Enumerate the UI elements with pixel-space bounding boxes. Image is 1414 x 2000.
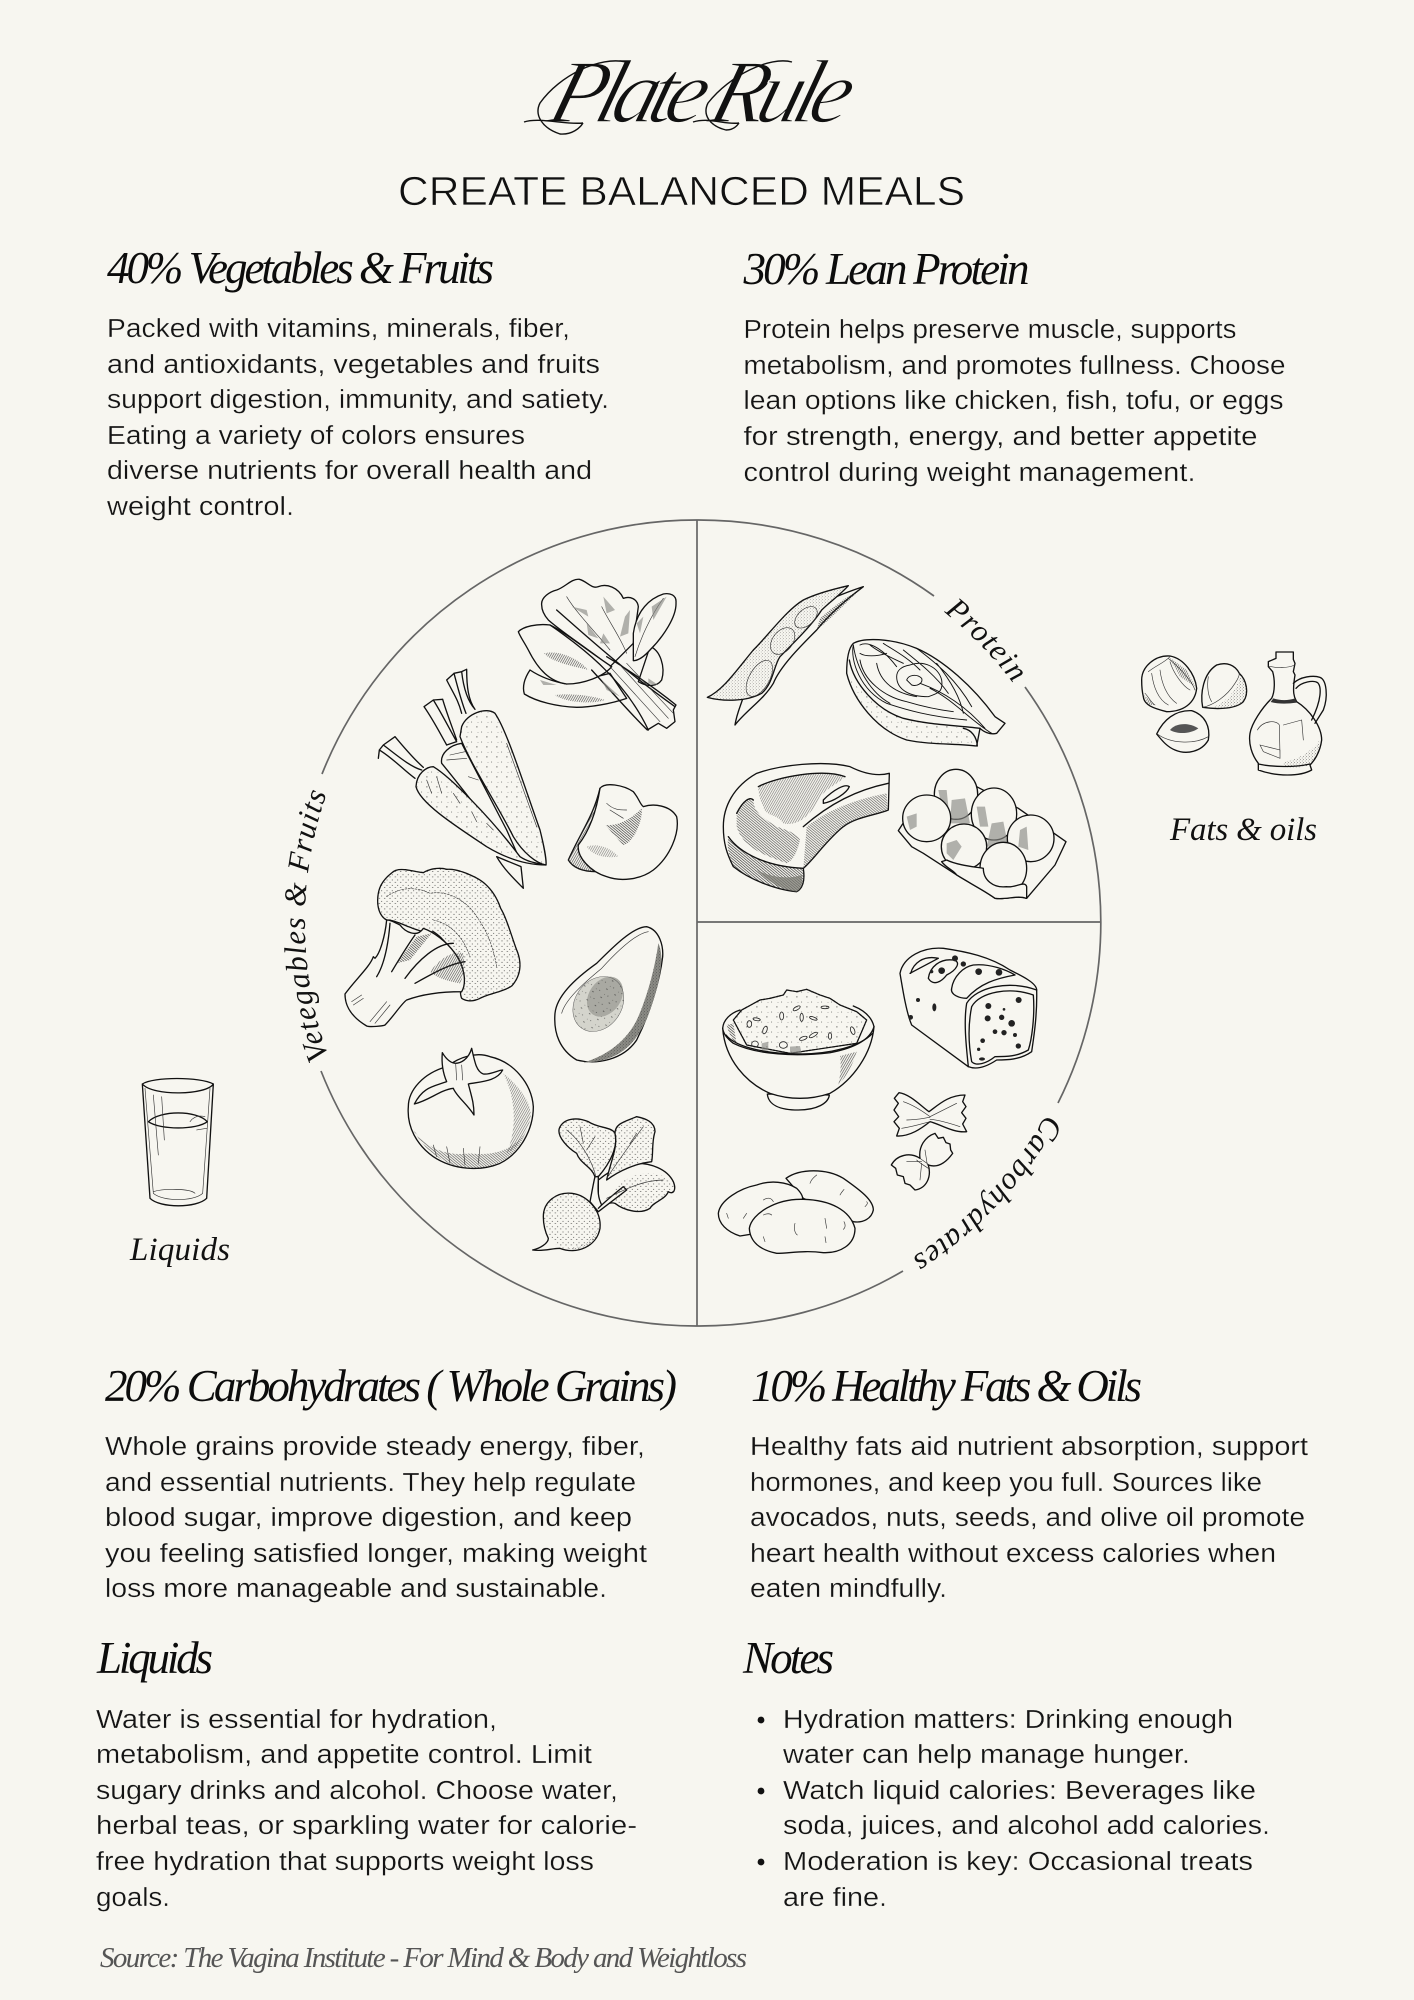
body text: lean protein: Protein helps preserve muscle, supports	[744, 316, 1236, 344]
label: fats and oils: Fats & oils	[1169, 812, 1317, 848]
heading: notes: Notes	[742, 1633, 834, 1683]
heading: 30% lean protein: 30% Lean Protein	[742, 244, 1030, 294]
body text: healthy fats: eaten mindfully.	[750, 1575, 947, 1603]
body text: carbohydrates	[105, 1433, 647, 1603]
icon: edamame bean pod	[707, 586, 863, 725]
icon: beet	[533, 1117, 675, 1251]
icon: glass of water	[142, 1078, 213, 1206]
icon: lettuce and spinach	[518, 579, 676, 730]
icon: rib steak	[723, 764, 889, 892]
body text: liquids: metabolism, and appetite control. Limit	[96, 1741, 592, 1769]
icon: seeded bread loaf	[900, 948, 1037, 1068]
body text: healthy fats: hormones, and keep you full. Sources like	[750, 1469, 1262, 1497]
icon: tomato	[408, 1048, 533, 1168]
body text: lean protein: metabolism, and promotes fullness. Choose	[744, 352, 1286, 380]
panel: notes	[742, 1633, 1270, 1912]
icon: hazelnuts and olive oil bottle	[1142, 652, 1326, 775]
panel: lean protein text	[742, 244, 1286, 487]
curved label: vegetables and fruits: Vetegables & Fruits	[284, 790, 327, 1063]
subtitle: CREATE BALANCED MEALS	[398, 168, 965, 214]
body text: vegetables and fruits: Eating a variety of colors ensures	[107, 422, 525, 450]
body text: carbohydrates: blood sugar, improve digestion, and keep	[105, 1504, 632, 1532]
heading: 40% vegetables and fruits: 40% Vegetables & Fruits	[107, 243, 494, 293]
icon: avocado	[555, 927, 663, 1063]
body text: vegetables and fruits: support digestion, immunity, and satiety.	[107, 386, 609, 414]
bullet list: notes: Watch liquid calories: Beverages like	[783, 1777, 1256, 1805]
heading: 20% carbohydrates: 20% Carbohydrates ( Whole Grains)	[105, 1361, 677, 1411]
body text: liquids: Water is essential for hydration,	[96, 1706, 497, 1734]
panel: carbohydrates text	[105, 1361, 677, 1603]
curved label: carbohydrates: Carbohydrates	[914, 1118, 1059, 1270]
body text: healthy fats: avocados, nuts, seeds, and olive oil promote	[750, 1504, 1305, 1532]
body text: liquids: free hydration that supports weight loss	[96, 1848, 594, 1876]
body text: vegetables and fruits: diverse nutrients for overall health and	[107, 457, 592, 485]
fats and oils illustration with label	[1142, 652, 1326, 848]
body text: vegetables and fruits: weight control.	[106, 493, 294, 521]
source line: Source: The Vagina Institute - For Mind & Body and Weightloss	[100, 1942, 747, 1974]
plate circle diagram	[284, 519, 1102, 1327]
label: liquids: Liquids	[129, 1232, 230, 1268]
body text: healthy fats	[750, 1433, 1308, 1603]
body text: vegetables and fruits	[106, 315, 609, 521]
body text: healthy fats: heart health without excess calories when	[750, 1540, 1276, 1568]
body text: liquids	[96, 1706, 637, 1912]
icon: potatoes	[718, 1171, 873, 1253]
body text: lean protein	[744, 316, 1286, 487]
liquids illustration with label	[129, 1078, 230, 1268]
bullet list: notes: soda, juices, and alcohol add calories.	[783, 1812, 1270, 1840]
body text: liquids: goals.	[96, 1884, 170, 1912]
icon: bowtie pasta	[891, 1093, 967, 1190]
icon: salmon steak	[847, 640, 1005, 746]
body text: carbohydrates: Whole grains provide steady energy, fiber,	[105, 1433, 645, 1461]
body text: lean protein: lean options like chicken, fish, tofu, or eggs	[744, 387, 1284, 415]
body text: healthy fats: Healthy fats aid nutrient absorption, support	[750, 1433, 1308, 1461]
curved label: protein: Protein	[944, 598, 1023, 682]
plate outline and dividers	[321, 520, 1101, 1326]
icon: carrots	[378, 669, 546, 888]
body text: vegetables and fruits: and antioxidants, vegetables and fruits	[107, 351, 600, 379]
panel: vegetables and fruits text	[106, 243, 609, 521]
bullet list: notes: water can help manage hunger.	[782, 1741, 1190, 1769]
panel: liquids text	[96, 1633, 637, 1912]
body text: carbohydrates: loss more manageable and sustainable.	[105, 1575, 607, 1603]
icon: rice bowl	[723, 989, 874, 1110]
bullet list: notes	[758, 1706, 1270, 1912]
heading: liquids: Liquids	[96, 1633, 213, 1683]
bullet list: notes: Hydration matters: Drinking enough	[783, 1706, 1233, 1734]
body text: lean protein: for strength, energy, and better appetite	[744, 423, 1258, 451]
title: Plate Rule	[538, 42, 868, 142]
body text: carbohydrates: and essential nutrients. They help regulate	[105, 1469, 636, 1497]
body text: liquids: herbal teas, or sparkling water for calorie-	[96, 1812, 637, 1840]
body text: vegetables and fruits: Packed with vitamins, minerals, fiber,	[107, 315, 570, 343]
panel: healthy fats text	[750, 1361, 1308, 1603]
bullet list: notes: Moderation is key: Occasional treats	[783, 1848, 1253, 1876]
icon: broccoli	[345, 868, 520, 1027]
icon: eggs in carton	[898, 769, 1066, 899]
bullet list: notes: are fine.	[783, 1884, 887, 1912]
icon: peach	[568, 785, 677, 879]
heading: 10% healthy fats and oils: 10% Healthy Fats & Oils	[751, 1361, 1142, 1411]
body text: carbohydrates: you feeling satisfied longer, making weight	[105, 1540, 647, 1568]
body text: liquids: sugary drinks and alcohol. Choose water,	[96, 1777, 618, 1805]
body text: lean protein: control during weight management.	[744, 459, 1196, 487]
